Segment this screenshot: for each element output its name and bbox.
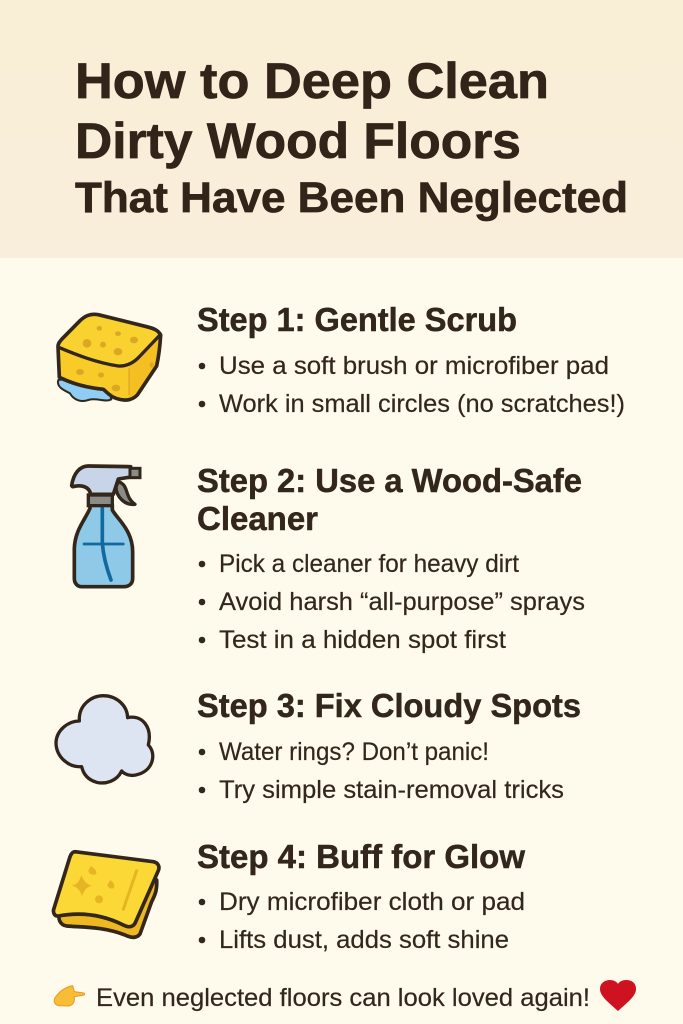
step 3 heading: Step 3: Fix Cloudy Spots — [197, 687, 581, 724]
icon: cloud — [56, 696, 153, 783]
step 1 bullets: Work in small circles (no scratches!) — [219, 390, 625, 418]
step 4 bullets — [199, 888, 525, 954]
title: How to Deep Clean — [75, 53, 549, 109]
step 4 — [197, 838, 525, 954]
title — [75, 53, 628, 222]
step 2 — [197, 462, 585, 654]
step 2 bullets: Avoid harsh “all-purpose” sprays — [219, 588, 585, 616]
title: Dirty Wood Floors — [75, 113, 521, 169]
header band — [0, 0, 683, 258]
step 3 bullets — [199, 738, 564, 804]
step 1 heading: Step 1: Gentle Scrub — [197, 301, 517, 338]
step 3 bullets: Water rings? Don’t panic! — [219, 738, 489, 766]
icon: spray bottle — [72, 466, 140, 587]
step 1 bullets: Use a soft brush or microfiber pad — [219, 352, 609, 380]
step 1 — [197, 301, 625, 418]
step 4 heading: Step 4: Buff for Glow — [197, 838, 525, 875]
step 3 — [197, 687, 581, 804]
title: That Have Been Neglected — [75, 174, 628, 222]
closing line — [54, 980, 636, 1012]
closing text: Even neglected floors can look loved again! — [96, 984, 590, 1012]
step 2 bullets: Test in a hidden spot first — [219, 626, 506, 654]
step 4 bullets: Lifts dust, adds soft shine — [219, 926, 509, 954]
icon: heart — [600, 980, 636, 1011]
icon: folded cloth — [54, 852, 159, 937]
step 1 bullets — [199, 352, 625, 418]
step 3 bullets: Try simple stain-removal tricks — [219, 776, 564, 804]
step 4 bullets: Dry microfiber cloth or pad — [219, 888, 525, 916]
icon: sponge — [58, 314, 161, 401]
step 2 bullets — [199, 550, 585, 654]
step 2 heading: Step 2: Use a Wood-Safe — [197, 462, 582, 499]
icon: pointing hand — [54, 986, 85, 1006]
step 2 heading — [197, 462, 582, 537]
step 2 bullets: Pick a cleaner for heavy dirt — [219, 550, 519, 578]
step 2 heading: Cleaner — [197, 500, 318, 537]
